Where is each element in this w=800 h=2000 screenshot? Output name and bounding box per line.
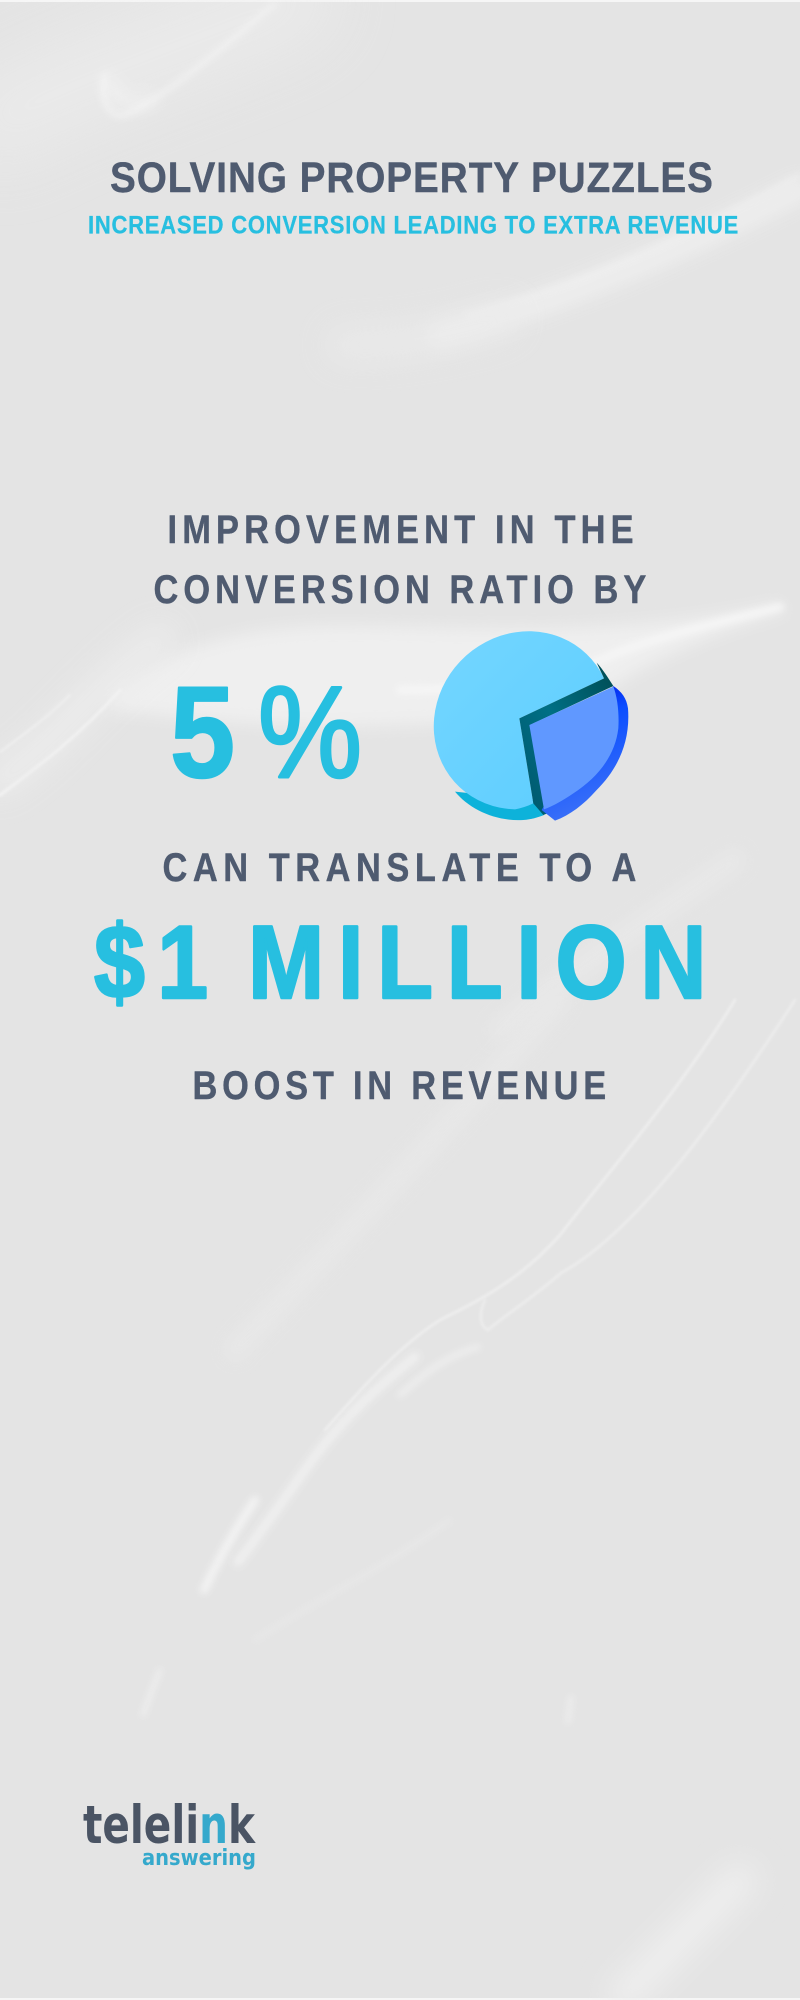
statistic: five percent: [170, 660, 362, 805]
logo tagline: answering: [142, 1846, 256, 1871]
pie: main top: [434, 631, 604, 809]
dollar amount: $1: [94, 904, 220, 1020]
logo wordmark: telelink: [83, 1795, 256, 1856]
icon: pie chart: [434, 631, 628, 821]
percent sign: %: [258, 660, 362, 805]
text: boost in revenue: BOOST IN REVENUE: [192, 1063, 606, 1108]
pie: main side: [455, 792, 544, 820]
text: can translate: CAN TRANSLATE TO A: [162, 845, 636, 890]
pie: slice top: [529, 687, 619, 809]
subtitle: INCREASED CONVERSION LEADING TO EXTRA REVENUE: [88, 211, 738, 239]
title: SOLVING PROPERTY PUZZLES: [110, 153, 713, 201]
text: improvement line two: CONVERSION RATIO BY: [154, 567, 646, 612]
million word: MILLION: [248, 904, 706, 1020]
pie: slice side: [542, 686, 628, 821]
statistic: one million: [94, 904, 706, 1020]
text: improvement line one: IMPROVEMENT IN THE: [168, 507, 634, 552]
number five: 5: [170, 660, 235, 805]
pie: wedge shadow: [519, 663, 613, 815]
logo: telelink answering: [83, 1795, 256, 1871]
